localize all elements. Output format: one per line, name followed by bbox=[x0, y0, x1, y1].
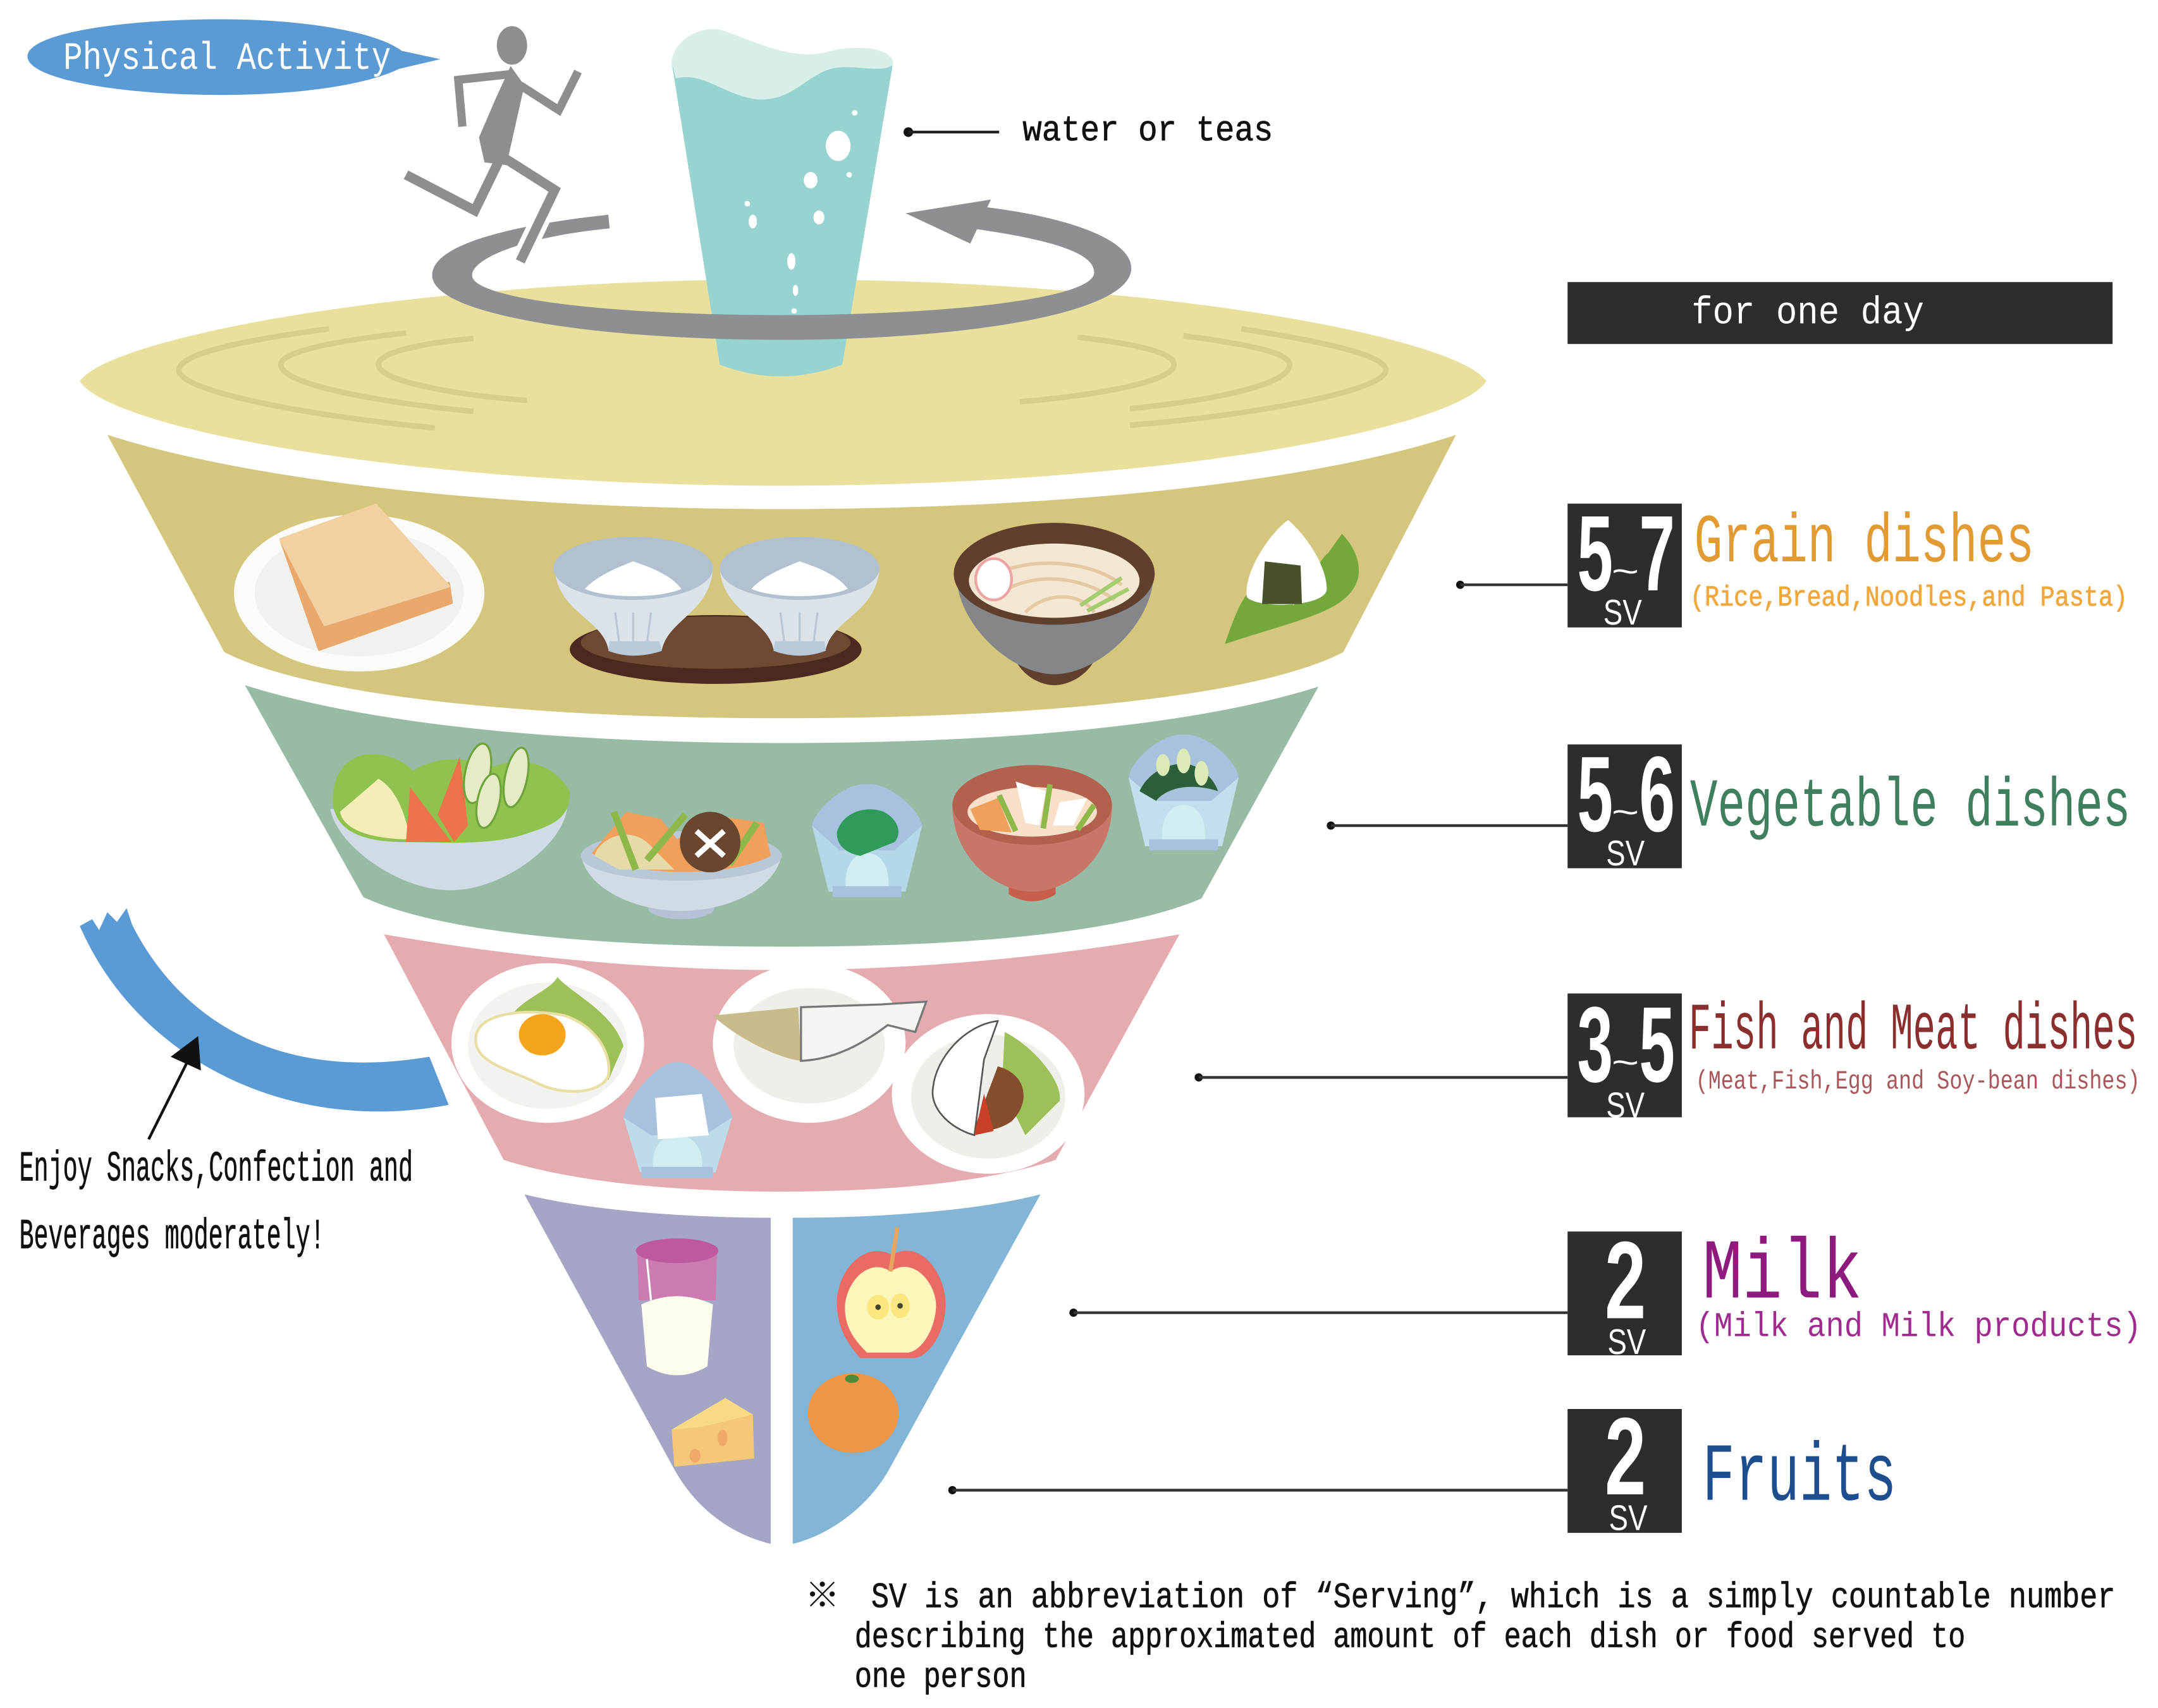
panel: water and tea top disc bbox=[80, 279, 1487, 485]
icon: small seaweed dish bbox=[1129, 735, 1239, 850]
bubble: Physical Activity: Physical Activity bbox=[63, 37, 391, 81]
panel: milk section bbox=[524, 1194, 771, 1544]
row: milk serving bbox=[1069, 1218, 2142, 1362]
icon: noodle bowl bbox=[953, 523, 1155, 685]
row: fish and meat dishes serving: SV bbox=[1606, 1085, 1645, 1125]
row: grain dishes serving: SV bbox=[1603, 592, 1642, 632]
text: SV footnote bbox=[805, 1567, 2116, 1698]
row: milk serving: SV bbox=[1607, 1322, 1646, 1362]
row: grain dishes serving: ~ bbox=[1612, 551, 1639, 591]
arrow: circular grey rotation arrow bbox=[432, 200, 1131, 340]
icon: hamburg steak plate bbox=[892, 1014, 1084, 1174]
row: fruits serving: SV bbox=[1609, 1498, 1648, 1538]
panel: fish and meat dishes band bbox=[384, 934, 1179, 1192]
row: fish and meat dishes serving: 5 bbox=[1639, 984, 1675, 1104]
icon: tofu dish bbox=[623, 1062, 732, 1178]
row: fruits serving bbox=[948, 1394, 1896, 1538]
text: SV footnote: ※ bbox=[805, 1567, 840, 1617]
row: fish and meat dishes serving: 3 bbox=[1577, 984, 1613, 1104]
text: snacks note: Beverages moderately! bbox=[19, 1213, 325, 1261]
text: snacks note bbox=[19, 1036, 413, 1261]
icon: salad bowl bbox=[330, 741, 570, 890]
row: vegetable dishes serving bbox=[1327, 734, 2130, 873]
row: grain dishes serving bbox=[1456, 493, 2128, 632]
arrow: note pointer bbox=[149, 1036, 201, 1139]
arrow: snacks ribbon bbox=[80, 908, 449, 1111]
icon: small spinach dish bbox=[812, 784, 922, 897]
label: water or teas bbox=[904, 111, 1273, 151]
row: fruits serving: 2 bbox=[1605, 1394, 1646, 1518]
row: vegetable dishes serving: 5 bbox=[1577, 734, 1613, 854]
header: for one day bbox=[1567, 282, 2112, 344]
panel: grain dishes band bbox=[107, 435, 1456, 718]
text: snacks note: Enjoy Snacks,Confection and bbox=[19, 1146, 413, 1194]
icon: miso soup bowl bbox=[952, 765, 1112, 901]
icon: rice ball on leaf bbox=[1225, 520, 1359, 644]
panel: fruits section bbox=[793, 1194, 1041, 1544]
icon: glass of water bbox=[671, 29, 893, 376]
row: fish and meat dishes serving: ~ bbox=[1612, 1042, 1639, 1082]
panel: vegetable dishes band bbox=[245, 685, 1318, 947]
row: fish and meat dishes serving bbox=[1194, 984, 2140, 1125]
icon: fried egg plate bbox=[451, 963, 644, 1123]
row: vegetable dishes serving: ~ bbox=[1612, 792, 1639, 832]
row: grain dishes serving: 5 bbox=[1577, 493, 1613, 613]
row: milk serving: Milk bbox=[1703, 1227, 1862, 1324]
row: fruits serving: Fruits bbox=[1703, 1432, 1896, 1525]
icon: simmered vegetables bowl bbox=[581, 812, 782, 919]
row: vegetable dishes serving: SV bbox=[1606, 833, 1645, 873]
text: SV footnote: one person bbox=[855, 1657, 1027, 1698]
bubble: Physical Activity bbox=[28, 19, 441, 95]
row: milk serving: 2 bbox=[1605, 1218, 1646, 1341]
row: grain dishes serving: 7 bbox=[1639, 493, 1675, 613]
icon: glass of milk bbox=[636, 1238, 718, 1376]
icon: apple bbox=[837, 1228, 945, 1358]
icon: orange bbox=[808, 1373, 898, 1453]
row: vegetable dishes serving: 6 bbox=[1639, 734, 1675, 854]
icon: toast on plate bbox=[234, 505, 484, 671]
header: for one day: for one day bbox=[1691, 292, 1924, 336]
icon: grilled fish plate bbox=[713, 963, 926, 1123]
icon: cheese bbox=[671, 1398, 754, 1467]
icon: running figure bbox=[406, 26, 578, 262]
icon: rice bowls on tray bbox=[553, 537, 880, 684]
label: water or teas: water or teas bbox=[1022, 111, 1273, 151]
